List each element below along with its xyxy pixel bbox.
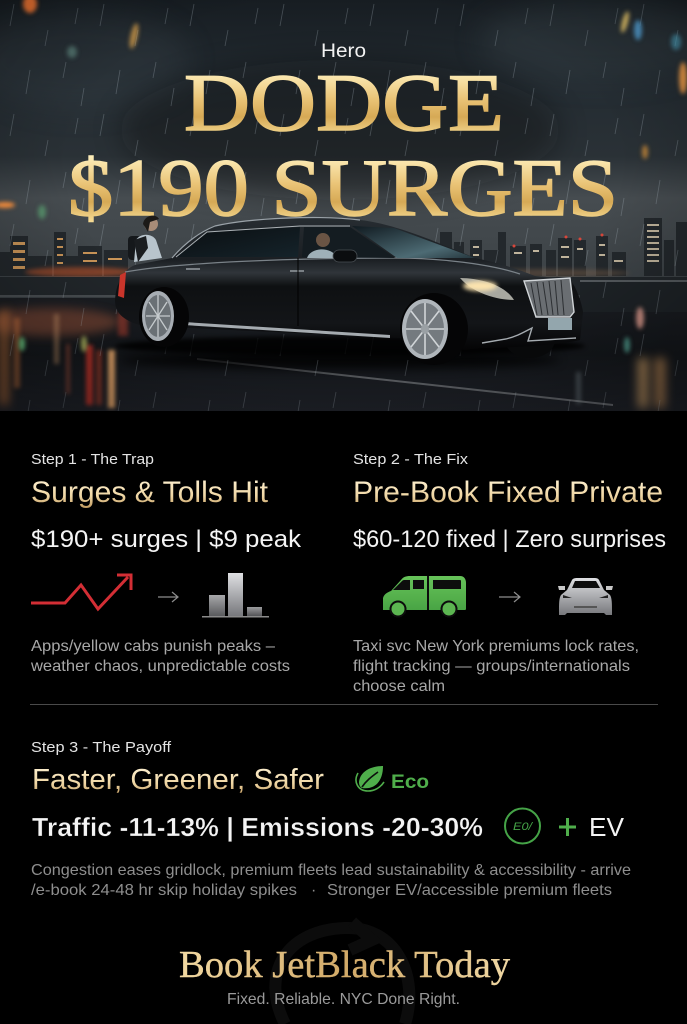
icon: eco leaf badge <box>356 766 429 793</box>
step 3 stats: Traffic -11-13% | Emissions -20-30% <box>32 812 483 842</box>
person beside car <box>128 216 162 262</box>
plus sign <box>559 818 576 836</box>
grille <box>524 278 574 317</box>
label: Hero: Hero <box>321 41 366 62</box>
step 1 heading: Surges & Tolls Hit <box>31 476 269 509</box>
driver <box>307 249 334 258</box>
step 2 label: Step 2 - The Fix <box>353 451 469 468</box>
car body <box>115 218 583 350</box>
wet road reflections <box>0 298 687 411</box>
arrow <box>499 592 520 602</box>
far front wheel <box>524 349 552 354</box>
icon: eco leaf badge: Eco <box>391 772 429 793</box>
panel: step 1 the trap <box>30 451 302 675</box>
chrome sill <box>184 322 390 338</box>
step 1 description: weather chaos, unpredictable costs <box>30 658 290 675</box>
step 1 stats: $190+ surges | $9 peak <box>31 526 302 553</box>
step 3 description: Congestion eases gridlock, premium fleets lead sustainability & accessibility - arrive <box>31 862 631 879</box>
licence plate <box>548 318 572 330</box>
lower bumper chrome <box>482 328 576 343</box>
city skyline <box>0 218 687 277</box>
arrow <box>158 592 178 602</box>
cta heading: Book JetBlack Today <box>179 944 510 986</box>
tail light <box>118 272 126 298</box>
step 2 description: flight tracking — groups/internationals <box>353 658 630 675</box>
front wheel <box>400 293 468 365</box>
icon: green van <box>383 576 466 616</box>
icon: red rising line <box>31 575 131 609</box>
call to action <box>179 922 510 1024</box>
step 3 description: Stronger EV/accessible premium fleets <box>327 882 612 899</box>
step 3 description: · <box>311 882 316 899</box>
icon: EV badge <box>505 808 540 844</box>
panel: hero <box>0 0 687 411</box>
step 1 label: Step 1 - The Trap <box>31 451 154 468</box>
rear wheel <box>139 287 189 347</box>
tagline: Fixed. Reliable. NYC Done Right. <box>227 991 460 1008</box>
headlight <box>460 278 514 300</box>
hero title: $190 SURGES <box>68 142 618 233</box>
step 3 description: /e-book 24-48 hr skip holiday spikes <box>31 882 297 899</box>
hero title: DODGE <box>184 57 504 148</box>
prism light flares <box>0 0 687 353</box>
limousine <box>115 218 585 365</box>
rain <box>0 0 687 411</box>
watermark circular arrow <box>275 922 409 1024</box>
step 2 description: choose calm <box>353 678 445 695</box>
mirror <box>333 250 357 262</box>
step 2 description <box>353 638 639 695</box>
panel: step 3 the payoff <box>31 739 631 899</box>
icon: bar chart <box>202 573 269 618</box>
icon: silver car front <box>558 578 613 615</box>
EV label: EV <box>589 812 625 842</box>
step 1 description <box>30 638 290 675</box>
step 3 label: Step 3 - The Payoff <box>31 739 172 756</box>
step 3 description <box>31 862 631 899</box>
panel: step 2 the fix <box>353 451 666 695</box>
door handles and lines <box>186 268 200 270</box>
hero title <box>71 75 614 222</box>
barrier <box>0 277 687 295</box>
step 3 heading: Faster, Greener, Safer <box>32 764 324 796</box>
step 2 heading: Pre-Book Fixed Private <box>353 476 663 509</box>
step 1 description: Apps/yellow cabs punish peaks – <box>31 638 275 655</box>
step 2 description: Taxi svc New York premiums lock rates, <box>353 638 639 655</box>
step 2 stats: $60-120 fixed | Zero surprises <box>353 526 666 553</box>
windows <box>176 227 300 257</box>
icon: EV badge: E0/ <box>513 821 533 833</box>
